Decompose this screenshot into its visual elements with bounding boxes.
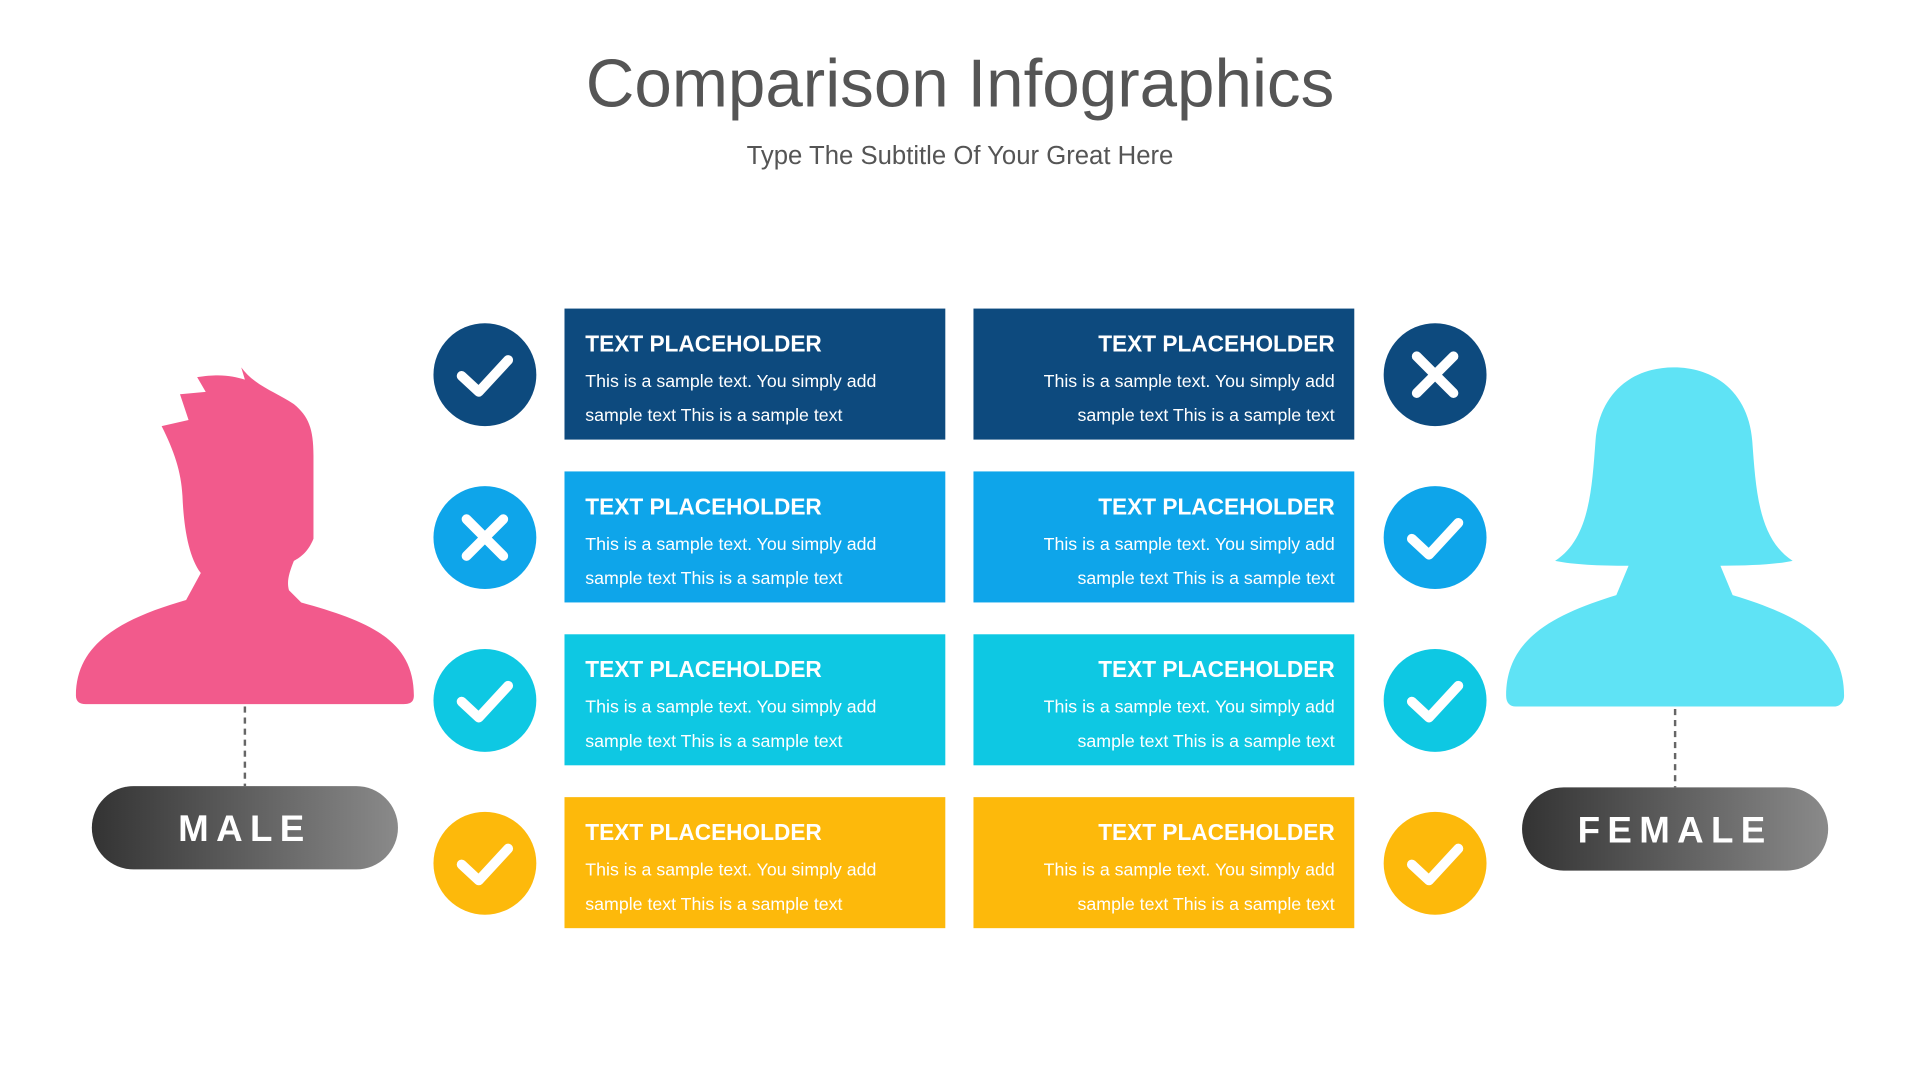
box right row2: TEXT PLACEHOLDER <box>1098 493 1335 519</box>
row 4 <box>433 797 1487 928</box>
connector: male <box>244 707 246 786</box>
box left row4 <box>564 797 945 928</box>
box left row2 <box>564 471 945 602</box>
icon: cross right row1 <box>1384 323 1487 426</box>
icon: check right row4 <box>1384 812 1487 915</box>
box left row2: This is a sample text. You simply add <box>585 534 876 554</box>
female silhouette <box>1506 367 1844 707</box>
male silhouette <box>76 367 414 704</box>
label pill: FEMALE <box>1522 787 1828 871</box>
icon: check left row4 <box>433 812 536 915</box>
label pill: MALE <box>92 786 398 869</box>
box left row1: sample text This is a sample text <box>585 405 843 425</box>
icon: check right row2 <box>1384 486 1487 589</box>
icon: check right row3 <box>1384 649 1487 752</box>
label pill: MALE: MALE <box>178 808 312 849</box>
box right row3: This is a sample text. You simply add <box>1044 697 1335 717</box>
box right row1 <box>973 309 1354 440</box>
box left row1: This is a sample text. You simply add <box>585 371 876 391</box>
icon: check left row1 <box>433 323 536 426</box>
box right row3 <box>973 634 1354 765</box>
label pill: FEMALE: FEMALE <box>1578 809 1773 850</box>
box right row1: TEXT PLACEHOLDER <box>1098 330 1335 356</box>
row 3 <box>433 634 1487 765</box>
row 2 <box>433 471 1487 602</box>
box left row4: This is a sample text. You simply add <box>585 860 876 880</box>
row 1 <box>433 309 1487 440</box>
box left row3: sample text This is a sample text <box>585 731 843 751</box>
box left row2: TEXT PLACEHOLDER <box>585 493 822 519</box>
box right row3: TEXT PLACEHOLDER <box>1098 656 1335 682</box>
box right row4 <box>973 797 1354 928</box>
box right row4: TEXT PLACEHOLDER <box>1098 819 1335 845</box>
box left row1: TEXT PLACEHOLDER <box>585 330 822 356</box>
box right row4: sample text This is a sample text <box>1078 894 1335 914</box>
box right row2: sample text This is a sample text <box>1078 568 1335 588</box>
box left row3 <box>564 634 945 765</box>
subtitle: Type The Subtitle Of Your Great Here <box>747 142 1173 170</box>
box right row1: This is a sample text. You simply add <box>1044 371 1335 391</box>
box left row4: TEXT PLACEHOLDER <box>585 819 822 845</box>
box left row3: TEXT PLACEHOLDER <box>585 656 822 682</box>
box right row1: sample text This is a sample text <box>1078 405 1335 425</box>
icon: cross left row2 <box>433 486 536 589</box>
title: Comparison Infographics <box>586 47 1334 122</box>
box left row2: sample text This is a sample text <box>585 568 843 588</box>
box right row4: This is a sample text. You simply add <box>1044 860 1335 880</box>
box left row3: This is a sample text. You simply add <box>585 697 876 717</box>
box left row4: sample text This is a sample text <box>585 894 843 914</box>
connector: female <box>1674 709 1676 787</box>
box right row2: This is a sample text. You simply add <box>1044 534 1335 554</box>
icon: check left row3 <box>433 649 536 752</box>
box left row1 <box>564 309 945 440</box>
box right row3: sample text This is a sample text <box>1078 731 1335 751</box>
box right row2 <box>973 471 1354 602</box>
